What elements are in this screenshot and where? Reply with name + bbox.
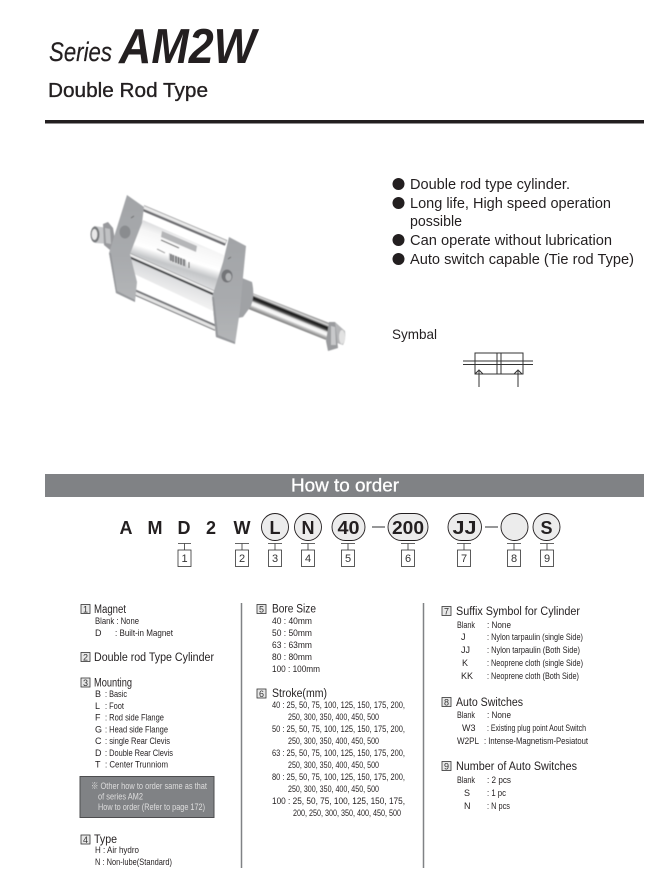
item 5: bore size: 80 : 80mm — [272, 652, 312, 662]
item 9: number of auto switches: 9 — [444, 762, 449, 772]
item 3: mounting: : Foot — [105, 701, 124, 711]
how to order bar — [45, 474, 644, 497]
note box — [80, 776, 214, 818]
item 8: auto switches: Blank — [457, 710, 475, 720]
item 9: number of auto switches: Number of Auto Switches — [456, 761, 577, 773]
subtitle: Double Rod Type — [48, 80, 208, 102]
code letters: M — [148, 518, 162, 538]
item 9: number of auto switches: Blank — [457, 775, 475, 785]
callout numbers: 6 — [405, 553, 411, 565]
how to order bar: How to order — [291, 474, 399, 496]
title: Series AM2W: AM2W — [118, 20, 259, 74]
bullet 2: Long life, High speed operation — [410, 195, 611, 212]
item 7: suffix symbol: Blank — [457, 620, 475, 630]
bullet 2: possible — [410, 213, 462, 230]
item 7: suffix symbol: KK — [461, 671, 473, 681]
code letters: W — [234, 518, 250, 538]
callout numbers: 5 — [345, 553, 351, 565]
code options: 40 — [338, 518, 360, 538]
item 5: bore size: 50 : 50mm — [272, 628, 312, 638]
callout numbers — [178, 544, 554, 566]
item 6: stroke — [257, 688, 405, 818]
item 8: auto switches: 8 — [444, 698, 449, 708]
item 2: double rod type cylinder: Double rod Type Cylinder — [94, 652, 214, 664]
title: Series AM2W — [49, 20, 259, 74]
item 3: mounting: G — [95, 724, 102, 734]
barrel — [128, 220, 226, 312]
item 6: stroke: 6 — [259, 689, 264, 699]
item 7: suffix symbol: : Nylon tarpaulin (single Side) — [487, 632, 583, 642]
middle tie rod — [128, 255, 216, 294]
item 5: bore size: 40 : 40mm — [272, 616, 312, 626]
item 9: number of auto switches: : N pcs — [487, 801, 510, 811]
pneumatic symbol — [463, 353, 533, 387]
item 7: suffix symbol: J — [461, 632, 466, 642]
callout numbers: 4 — [305, 553, 311, 565]
item 1: magnet: 1 — [83, 604, 88, 614]
item 4: type: H : Air hydro — [95, 845, 139, 855]
item 6: stroke: 200, 250, 300, 350, 400, 450, 500 — [293, 808, 401, 818]
code options: S — [540, 518, 553, 538]
item 8: auto switches: Auto Switches — [456, 697, 523, 709]
item 5: bore size: 63 : 63mm — [272, 640, 312, 650]
item 4: type: N : Non-lube(Standard) — [95, 857, 172, 867]
item 3: mounting: : single Rear Clevis — [105, 736, 170, 746]
item 7: suffix symbol: : Neoprene cloth (single Side) — [487, 658, 583, 668]
item 8: auto switches — [442, 697, 588, 746]
item 7: suffix symbol — [442, 606, 583, 681]
item 4: type: Type — [94, 834, 117, 846]
code options — [262, 514, 560, 540]
bullet 2 — [392, 195, 611, 230]
item 3: mounting: T — [95, 760, 101, 770]
item 5: bore size: 100 : 100mm — [272, 664, 320, 674]
item 6: stroke: 100 : 25, 50, 75, 100, 125, 150, 175, — [272, 796, 405, 806]
item 9: number of auto switches: N — [464, 801, 470, 811]
item 1: magnet: D — [95, 628, 102, 638]
symbol label: Symbal — [392, 326, 437, 342]
item 6: stroke: 250, 300, 350, 400, 450, 500 — [288, 784, 379, 794]
item 6: stroke: 40 : 25, 50, 75, 100, 125, 150, 175, 200, — [272, 700, 405, 710]
item 2: double rod type cylinder: 2 — [83, 652, 88, 662]
item 5: bore size — [257, 604, 320, 674]
item 5: bore size: 5 — [259, 604, 264, 614]
item 3: mounting: D — [95, 748, 102, 758]
item 9: number of auto switches: : 2 pcs — [487, 775, 511, 785]
item 8: auto switches: : None — [487, 710, 511, 720]
item 3: mounting: L — [95, 701, 100, 711]
item 3: mounting: : Head side Flange — [105, 724, 168, 734]
item 1: magnet: : Built-in Magnet — [115, 628, 173, 638]
item 8: auto switches: W2PL — [457, 736, 479, 746]
item 3: mounting: B — [95, 689, 101, 699]
item 1: magnet: Blank : None — [95, 616, 139, 626]
product image: double rod cylinder — [90, 195, 345, 351]
item 9: number of auto switches: S — [464, 788, 470, 798]
note box: of series AM2 — [98, 792, 143, 802]
item 1: magnet — [81, 604, 173, 638]
callout numbers: 8 — [511, 553, 517, 565]
item 3: mounting: F — [95, 712, 101, 722]
item 3: mounting: : Double Rear Clevis — [105, 748, 173, 758]
item 3: mounting: C — [95, 736, 102, 746]
item 7: suffix symbol: JJ — [461, 645, 470, 655]
code options: 200 — [392, 518, 424, 538]
code options: N — [302, 518, 314, 538]
callout numbers: 1 — [181, 553, 188, 565]
bullet 1: Double rod type cylinder. — [410, 176, 570, 193]
item 7: suffix symbol: : None — [487, 620, 511, 630]
item 9: number of auto switches — [442, 761, 577, 811]
code letters — [120, 518, 250, 538]
code letters: A — [120, 518, 132, 538]
item 7: suffix symbol: 7 — [444, 606, 449, 616]
left end plate — [109, 195, 144, 302]
item 3: mounting — [81, 678, 173, 770]
bullet 3: Can operate without lubrication — [410, 232, 612, 249]
code options: JJ — [452, 518, 476, 538]
code options: L — [270, 518, 280, 538]
item 6: stroke: 250, 300, 350, 400, 450, 500 — [288, 760, 379, 770]
code letters: D — [178, 518, 190, 538]
item 4: type — [81, 834, 172, 867]
bullet 4: Auto switch capable (Tie rod Type) — [410, 251, 634, 268]
callout numbers: 7 — [461, 553, 467, 565]
feature list — [392, 176, 634, 268]
title: Series AM2W: Series — [49, 37, 112, 67]
item 3: mounting: : Center Trunniom — [105, 760, 168, 770]
item 6: stroke: 63 : 25, 50, 75, 100, 125, 150, 175, 200, — [272, 748, 405, 758]
item 8: auto switches: : Existing plug point Aout Switch — [487, 723, 586, 733]
left rod stub — [94, 226, 110, 244]
order code diagram — [120, 514, 560, 566]
item 1: magnet: Magnet — [94, 604, 127, 616]
item 3: mounting: 3 — [83, 678, 88, 688]
item 7: suffix symbol: K — [462, 658, 468, 668]
code letters: 2 — [206, 518, 216, 538]
item 9: number of auto switches: : 1 pc — [487, 788, 506, 798]
item 3: mounting: Mounting — [94, 678, 132, 690]
item 6: stroke: 80 : 25, 50, 75, 100, 125, 150, 175, 200, — [272, 772, 405, 782]
header rule — [45, 120, 644, 124]
item 6: stroke: Stroke(mm) — [272, 688, 327, 700]
piston rod — [246, 292, 332, 340]
label band — [161, 231, 197, 252]
item 4: type: 4 — [83, 835, 88, 845]
item 6: stroke: 250, 300, 350, 400, 450, 500 — [288, 712, 379, 722]
item 7: suffix symbol: : Neoprene cloth (Both Side) — [487, 671, 579, 681]
item 8: auto switches: W3 — [462, 723, 476, 733]
note box: How to order (Refer to page 172) — [98, 802, 205, 812]
item 7: suffix symbol: Suffix Symbol for Cylinder — [456, 606, 580, 618]
tie rods — [143, 208, 226, 243]
item 8: auto switches: : Intense-Magnetism-Pesiatout — [484, 736, 588, 746]
boss — [238, 278, 253, 318]
column dividers — [242, 603, 424, 868]
item 7: suffix symbol: : Nylon tarpaulin (Both Side) — [487, 645, 580, 655]
item 3: mounting: : Basic — [105, 689, 127, 699]
item 6: stroke: 250, 300, 350, 400, 450, 500 — [288, 736, 379, 746]
barcode — [169, 253, 186, 267]
note box: ※ Other how to order same as that — [91, 781, 207, 791]
right end plate — [212, 237, 246, 344]
callout numbers: 3 — [272, 553, 278, 565]
item 6: stroke: 50 : 25, 50, 75, 100, 125, 150, 175, 200, — [272, 724, 405, 734]
item 5: bore size: Bore Size — [272, 604, 316, 616]
callout numbers: 9 — [544, 553, 550, 565]
item 3: mounting: : Rod side Flange — [105, 712, 164, 722]
callout numbers: 2 — [239, 553, 245, 565]
